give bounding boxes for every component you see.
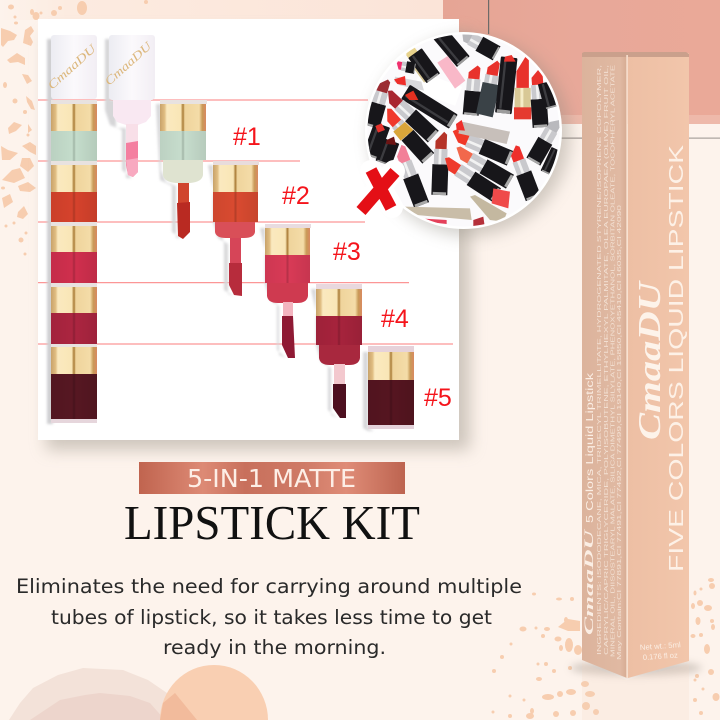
- badge: 5-in-1 matte: [139, 462, 405, 494]
- white cap: CmaaDU: [45, 41, 100, 92]
- label #2: #2: [282, 182, 310, 210]
- bottle #2: [208, 161, 259, 296]
- badge: 5-in-1 matte: 5-IN-1 MATTE: [187, 464, 356, 493]
- description text: ready in the morning.: [163, 636, 386, 659]
- white cap: [45, 35, 100, 99]
- box ingredients: May Contain:CI 77891,CI 77491,CI 77492,CI 77499,CI 19140,CI 15850,CI 45410,CI 16035,CI 42090: [617, 205, 623, 660]
- box ingredients: [597, 64, 623, 660]
- box brand title: CmaaDU: [631, 280, 667, 440]
- circle: pile of separate lipsticks: [363, 26, 565, 229]
- description text: tubes of lipstick, so it takes less time to get: [51, 606, 492, 629]
- product box: [581, 52, 689, 678]
- box left face: [582, 53, 627, 678]
- box ingredients: CAPRYLIC/CAPRIC TRIGLYCERIDE, POLYISOBUTENE, ETHYLHEXYL PALMITATE, OLEA EUROPAEA (OLIVE) FRUIT OIL,: [604, 64, 610, 655]
- box right face: [628, 53, 689, 678]
- label #4: #4: [381, 305, 409, 333]
- box shadow: [570, 660, 702, 676]
- open white cap with applicator: [102, 35, 155, 178]
- box ridge: [626, 55, 628, 678]
- bottle #3: [260, 224, 311, 358]
- panel: terracotta colour block: [443, 0, 720, 124]
- box net weight: Net wt.: 5ml: [640, 640, 681, 652]
- label #5: #5: [424, 384, 452, 412]
- guide lines: [38, 100, 453, 344]
- box side brand: CmaaDU: [581, 529, 596, 635]
- description text: [16, 575, 522, 659]
- shade #5 wine: [51, 347, 97, 423]
- bottle #5: [363, 346, 414, 431]
- box net weight: [640, 640, 681, 662]
- splatter: left: [1, 0, 148, 256]
- circle shadow: [370, 36, 570, 236]
- top strip wash: [0, 0, 445, 20]
- shade #2 red: [51, 165, 97, 222]
- label #1: #1: [233, 123, 261, 151]
- label #3: #3: [333, 238, 361, 266]
- box main label: FIVE COLORS LIQUID LIPSTICK: [665, 145, 688, 572]
- stacked 5-in-1 lipstick: [45, 35, 100, 424]
- box net weight: 0.176 fl oz: [643, 651, 678, 662]
- bottle #1: [156, 100, 207, 239]
- bottle #4: [311, 284, 362, 418]
- box side title: 5 Colors Liquid Lipstick: [584, 372, 596, 523]
- open white cap with applicator: CmaaDU: [102, 38, 155, 88]
- description text: Eliminates the need for carrying around multiple: [16, 575, 522, 598]
- box top edge: [582, 52, 689, 57]
- panel: white product card: [38, 19, 459, 440]
- decorative ink line: [560, 138, 720, 139]
- box reflection: [582, 663, 689, 720]
- title: LIPSTICK KIT: [124, 495, 420, 550]
- shade #4 berry: [51, 287, 97, 344]
- box ingredients: INGREDIENTS: ISODODECANE, MICA, TRIDECYL TRIMELLITATE, HYDROGENATED STYRENE/ISOPRENE COPOLYMER,: [597, 64, 603, 655]
- red X mark: [360, 170, 395, 211]
- shade #1 green: [51, 104, 97, 161]
- box ingredients: MINERAL OIL, DIISOSTEARYL MALATE, SILICA DIMETHYL SILYLATE, PHENOXYETHANOL, SORBITAN OLEATE, TOCOPHERYL ACETATE: [610, 65, 616, 657]
- shade #3 crimson: [51, 226, 97, 283]
- splatter: lower right: [492, 578, 720, 719]
- decorative circles: bottom left: [9, 665, 268, 720]
- card shadow: [46, 33, 470, 450]
